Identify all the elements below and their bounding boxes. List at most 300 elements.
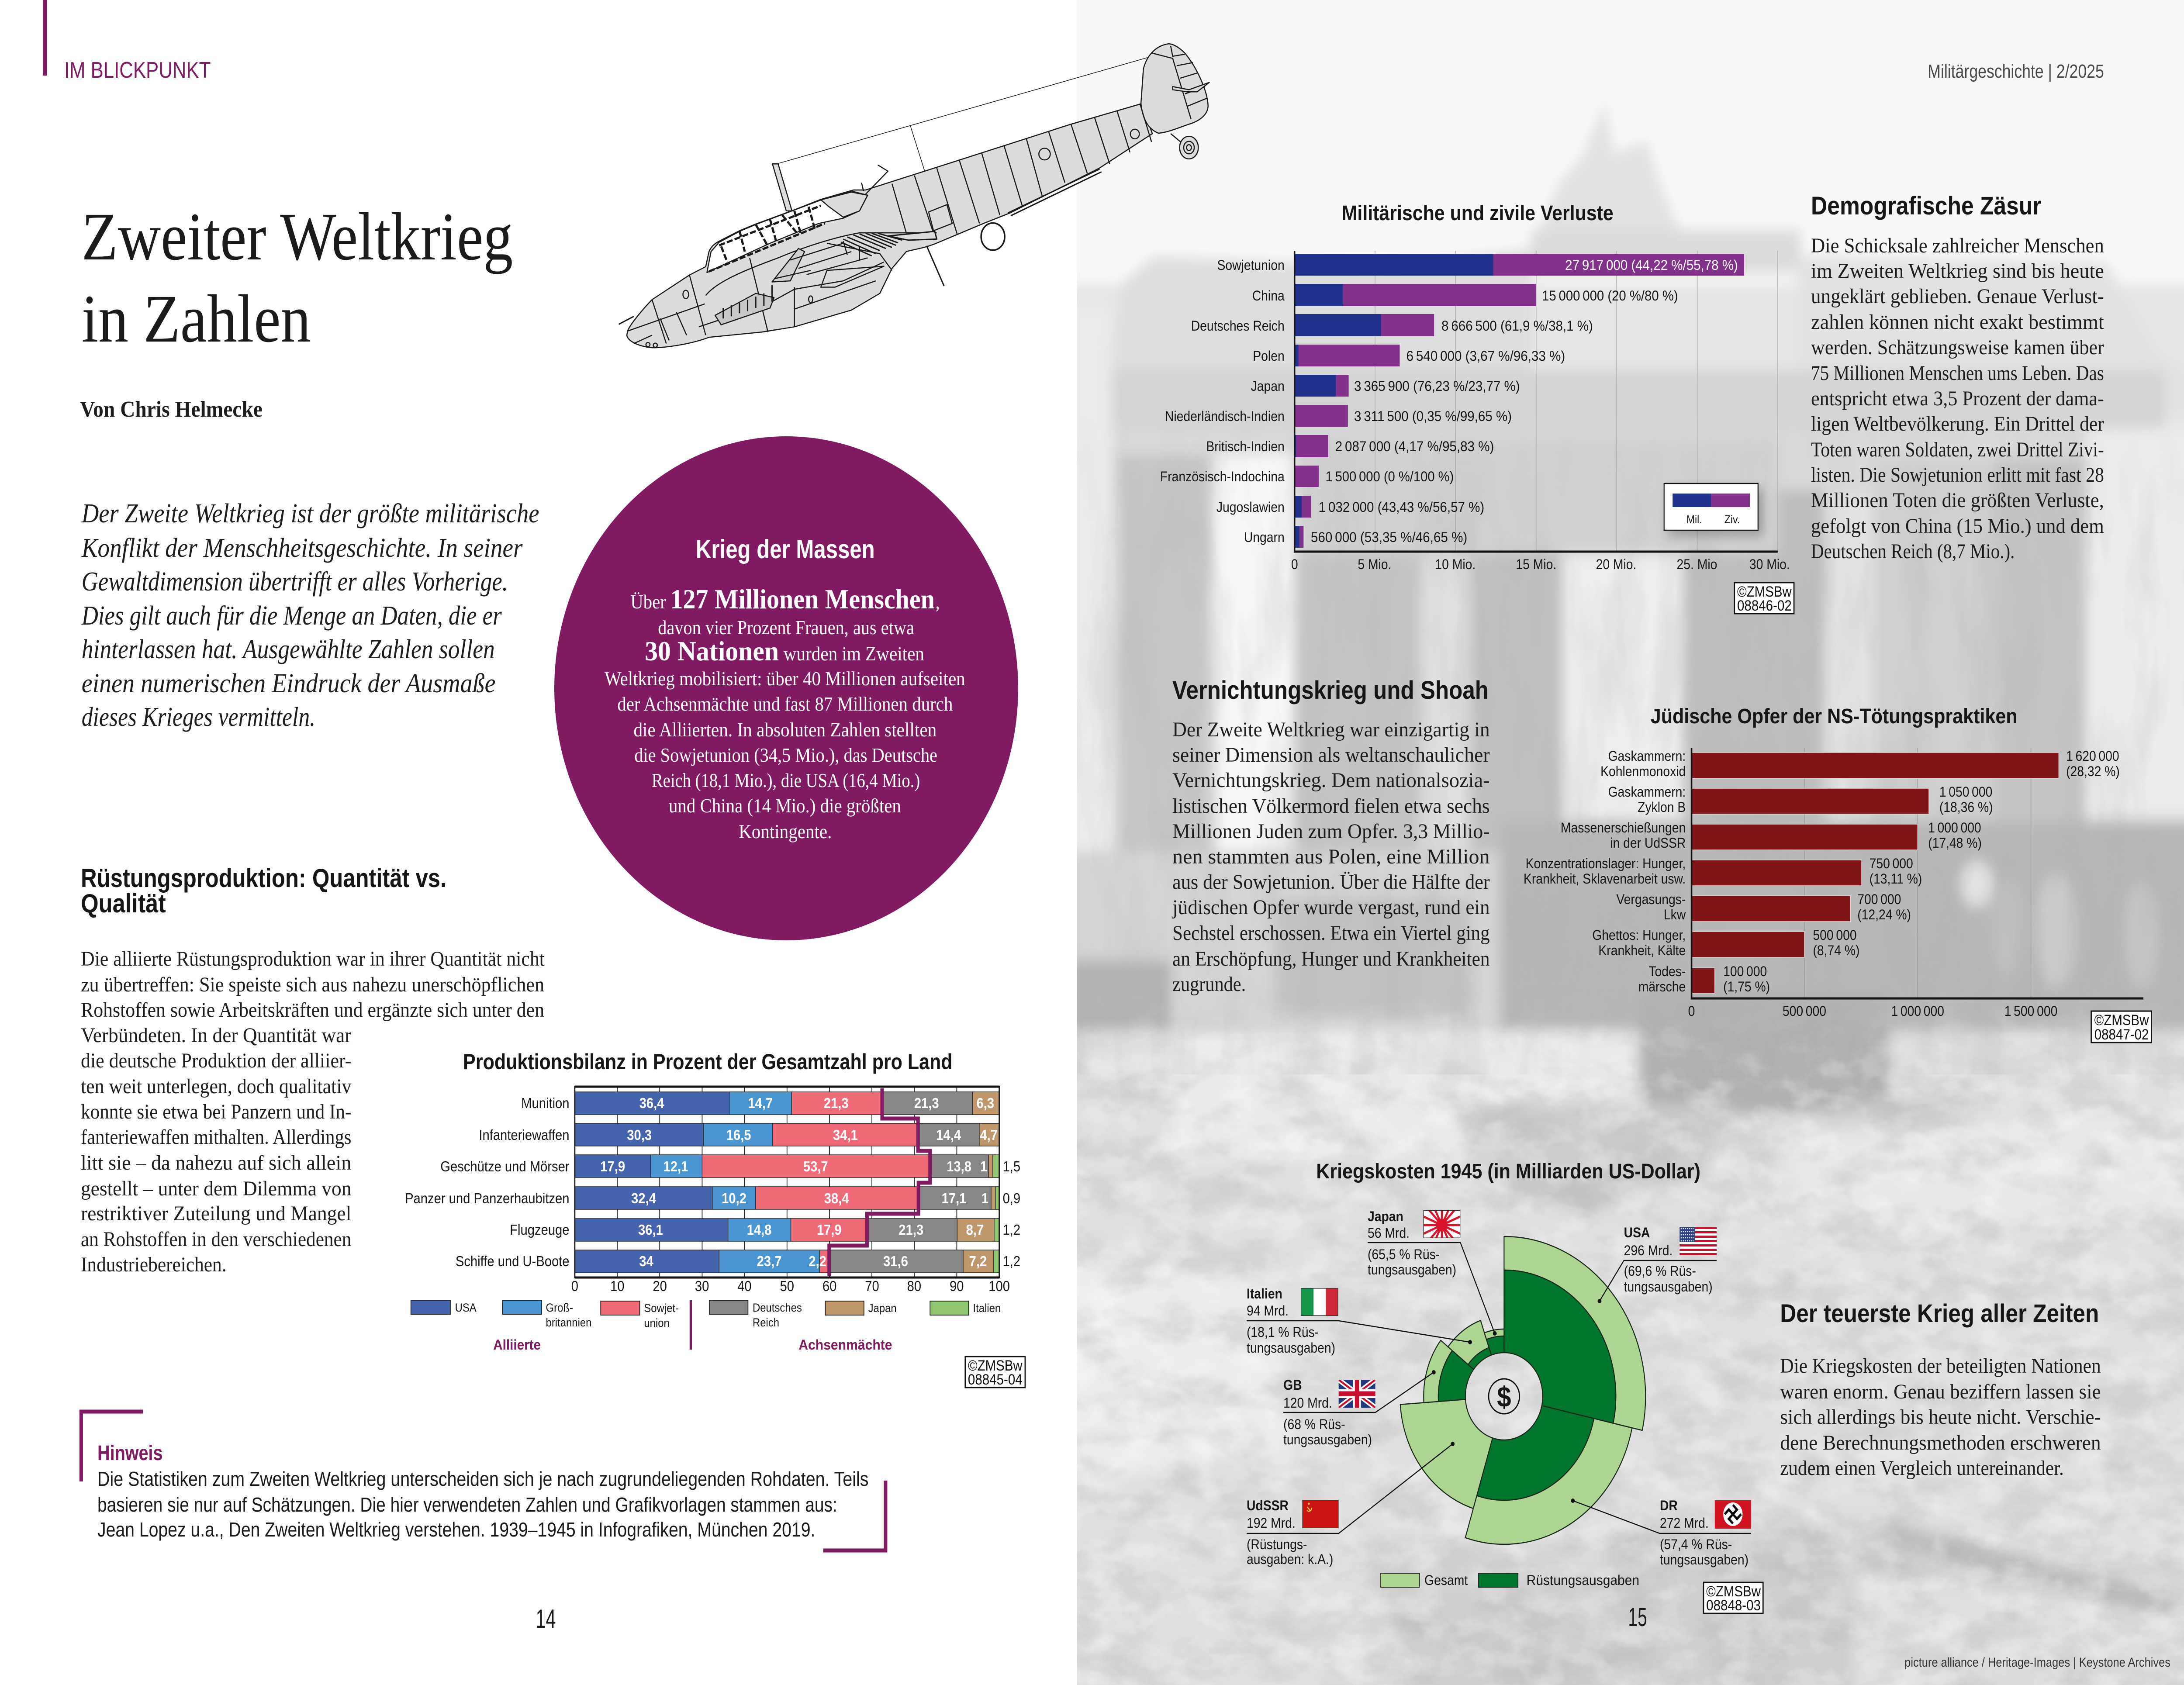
legend: Sowjet- — [644, 1302, 679, 1315]
bar values: 13,8 — [947, 1158, 971, 1174]
country labels: Jugoslawien — [1216, 500, 1285, 515]
text block: Demografische Zäsur: 75 Millionen Menschen ums Leben. Das — [1811, 362, 2104, 385]
x axis labels: 80 — [907, 1278, 921, 1294]
country labels: Polen — [1253, 349, 1285, 364]
heading: Rüstungsproduktion: Qualität — [81, 889, 166, 918]
circle text: Weltkrieg mobilisiert: über 40 Millionen aufseiten — [605, 668, 965, 690]
text block: Der teuerste Krieg: sich allerdings bis heute nicht. Verschie- — [1780, 1405, 2101, 1429]
label: UdSSR: (Rüstungs- — [1247, 1537, 1307, 1552]
credit box: ©ZMSBw — [968, 1357, 1023, 1374]
label: USA — [1598, 1225, 1717, 1303]
category labels: Konzentrationslager: Hunger, — [1526, 856, 1686, 871]
text block: Demografische Zäsur: gefolgt von China (15 Mio.) und dem — [1811, 514, 2104, 538]
legend box: Mil. — [1686, 514, 1702, 526]
chart: Jüdische Opfer — [1524, 704, 2152, 1043]
label: GB: 120 Mrd. — [1283, 1395, 1332, 1411]
value labels: 3 311 500 (0,35 %/99,65 %) — [1354, 409, 1512, 424]
bar values: 34,1 — [833, 1127, 858, 1143]
x axis labels: 30 Mio. — [1749, 557, 1790, 572]
legend box — [1664, 483, 1762, 535]
legend: Japan — [868, 1302, 897, 1315]
bar values: 14,7 — [748, 1095, 773, 1111]
value labels: 2 087 000 (4,17 %/95,83 %) — [1335, 439, 1494, 454]
label: Italien: tungsausgaben) — [1247, 1340, 1335, 1356]
country labels — [1160, 258, 1285, 545]
chart title: Jüdische Opfer der NS-Tötungspraktiken — [1651, 704, 2018, 728]
country labels: Niederländisch-Indien — [1165, 409, 1285, 424]
circle text: 30 Nationen — [645, 636, 779, 667]
country labels: Ungarn — [1244, 530, 1285, 545]
text block: Demografische Zäsur: zahlen können nicht exakt bestimmt — [1811, 311, 2104, 334]
text block: Demografische Zäsur — [1811, 234, 2104, 563]
bar values: 36,4 — [639, 1095, 664, 1111]
value labels: 560 000 (53,35 %/46,65 %) — [1311, 530, 1467, 545]
section label: IM BLICKPUNKT — [64, 58, 211, 83]
bar values: 6,3 — [976, 1095, 994, 1111]
value labels: 1 500 000 (0 %/100 %) — [1326, 469, 1454, 484]
bar values: 36,1 — [638, 1222, 663, 1238]
icon: dollar — [1489, 1379, 1520, 1414]
row labels: Schiffe und U-Boote — [456, 1253, 570, 1269]
category labels: Vergasungs- — [1616, 892, 1686, 907]
category labels — [1524, 749, 1686, 994]
photo credit: picture alliance / Heritage-Images | Keystone Archives — [1904, 1655, 2170, 1670]
text block: Rüstungsproduktion: Verbündeten. In der Quantität war — [81, 1024, 351, 1047]
circle text: , — [936, 591, 940, 613]
x axis labels — [571, 1278, 1010, 1294]
circle text: die Sowjetunion (34,5 Mio.), das Deutsche — [634, 745, 937, 767]
legend: Italien — [973, 1302, 1001, 1315]
label: DR: 272 Mrd. — [1660, 1516, 1709, 1531]
sector: Italien — [1448, 1320, 1491, 1369]
credit box: ©ZMSBw — [2094, 1012, 2149, 1028]
text block: Rüstungsproduktion: Rohstoffen sowie Arbeitskräften und ergänzte sich unter den — [81, 998, 544, 1022]
title: Zweiter Weltkrieg — [82, 199, 513, 274]
x axis labels: 20 — [653, 1278, 667, 1294]
chart title: Kriegskosten 1945 (in Milliarden US-Dollar) — [1316, 1160, 1700, 1183]
circle text: die Alliierten. In absoluten Zahlen stellten — [633, 719, 936, 741]
legend: Rüstungsausgaben — [1527, 1573, 1639, 1588]
text block: Vernichtungskrieg: an Erschöpfung, Hunger und Krankheiten — [1172, 947, 1490, 970]
label: UdSSR — [1247, 1442, 1455, 1567]
page number 15: 15 — [1628, 1603, 1647, 1632]
text block: Vernichtungskrieg: Vernichtungskrieg. Dem nationalsozia- — [1172, 769, 1490, 792]
value labels: 15 000 000 (20 %/80 %) — [1542, 288, 1678, 304]
x axis labels: 10 — [610, 1278, 625, 1294]
label: GB — [1283, 1370, 1436, 1447]
row labels: Panzer und Panzerhaubitzen — [405, 1190, 570, 1206]
flag: DR — [1715, 1500, 1751, 1529]
panel: Krieg der Massen circle — [554, 436, 1018, 940]
chart: Kriegskosten radial — [1247, 1160, 1763, 1613]
flag: GB — [1339, 1380, 1375, 1408]
label: USA: USA — [1624, 1225, 1650, 1240]
chart title: Militärische und zivile Verluste — [1342, 201, 1614, 225]
category labels: Massenerschießungen — [1561, 820, 1686, 836]
bar values: 53,7 — [803, 1158, 828, 1174]
x axis labels: 50 — [780, 1278, 794, 1294]
x axis labels: 25. Mio — [1677, 557, 1717, 572]
x axis labels: 15 Mio. — [1516, 557, 1556, 572]
value labels: (12,24 %) — [1857, 907, 1911, 922]
label: Alliierte: Alliierte — [493, 1337, 541, 1353]
bars — [1295, 254, 1744, 548]
heading: Der teuerste Krieg aller Zeiten: Der teuerste Krieg aller Zeiten — [1780, 1299, 2099, 1328]
text block: Rüstungsproduktion: gestellt – unter dem Dilemma von — [81, 1177, 351, 1200]
text block: Demografische Zäsur: Millionen Toten die größten Verluste, — [1811, 489, 2104, 512]
category labels: Todes- — [1648, 964, 1686, 979]
text block: Rüstungsproduktion: Industriebereichen. — [81, 1253, 227, 1276]
bar values: 17,1 — [942, 1190, 966, 1206]
label: Japan: (65,5 % Rüs- — [1368, 1247, 1440, 1262]
x axis labels: 1 000 000 — [1891, 1004, 1944, 1019]
row labels: Geschütze und Mörser — [440, 1158, 570, 1174]
text block: Demografische Zäsur: werden. Schätzungsweise kamen über — [1811, 336, 2104, 359]
sector: USA — [1504, 1236, 1645, 1430]
small segment values: 1,2 — [1003, 1253, 1020, 1269]
legend: britannien — [546, 1316, 591, 1329]
bar values: 10,2 — [722, 1190, 746, 1206]
Allies/Axis divider line — [829, 1088, 930, 1276]
small segment values: 0,9 — [1003, 1190, 1020, 1206]
category labels: Gaskammern: — [1608, 784, 1686, 800]
x axis labels: 100 — [988, 1278, 1010, 1294]
text block: Der teuerste Krieg: waren enorm. Genau beziffern lassen sie — [1780, 1380, 2101, 1403]
intro text: hinterlassen hat. Ausgewählte Zahlen sollen — [82, 634, 495, 664]
x axis labels: 1 500 000 — [2004, 1004, 2057, 1019]
bar values: 38,4 — [824, 1190, 849, 1206]
label: GB: GB — [1283, 1378, 1302, 1393]
label: USA: tungsausgaben) — [1624, 1279, 1713, 1295]
circle text — [605, 584, 965, 843]
text block: Demografische Zäsur: Toten waren Soldaten, zwei Drittel Zivi- — [1811, 438, 2104, 461]
label: USA: 296 Mrd. — [1624, 1243, 1673, 1258]
credit box: 08846-02 — [1737, 597, 1792, 614]
x axis labels: 0 — [571, 1278, 578, 1294]
bar values: 1 — [981, 1190, 988, 1206]
value labels: (1,75 %) — [1723, 979, 1770, 994]
category labels: Zyklon B — [1638, 800, 1686, 815]
small segment values: 1,5 — [1003, 1158, 1020, 1174]
bar values: 8,7 — [966, 1222, 984, 1238]
note box: Hinweis: Jean Lopez u.a., Den Zweiten Weltkrieg verstehen. 1939–1945 in Infografiken, München 2019. — [97, 1519, 815, 1541]
legend — [1381, 1573, 1639, 1588]
sector: DR — [1465, 1405, 1632, 1544]
text block: Demografische Zäsur: ligen Weltbevölkerung. Ein Drittel der — [1811, 412, 2104, 435]
label: UdSSR: ausgaben: k.A.) — [1247, 1552, 1333, 1567]
x axis labels — [1688, 1004, 2057, 1019]
intro text: Der Zweite Weltkrieg ist der größte militärische — [81, 498, 539, 528]
label: Italien: (18,1 % Rüs- — [1247, 1325, 1319, 1340]
x axis labels: 90 — [950, 1278, 964, 1294]
page marker bar — [43, 0, 47, 76]
title — [82, 199, 513, 356]
bar values: 17,9 — [817, 1222, 842, 1238]
text block: Der teuerste Krieg — [1780, 1354, 2101, 1480]
value labels: 1 032 000 (43,43 %/56,57 %) — [1319, 500, 1484, 515]
intro text: Gewaltdimension übertrifft er alles Vorherige. — [82, 566, 508, 597]
label: GB: (68 % Rüs- — [1283, 1417, 1345, 1432]
text block: Vernichtungskrieg: jüdischen Opfer wurde vergast, rund ein — [1171, 896, 1490, 919]
x axis labels: 10 Mio. — [1435, 557, 1476, 572]
credit box — [965, 1357, 1025, 1388]
value labels: 8 666 500 (61,9 %/38,1 %) — [1441, 318, 1593, 334]
country labels: Deutsches Reich — [1191, 318, 1285, 334]
text block: Rüstungsproduktion: Die alliierte Rüstungsproduktion war in ihrer Quantität nicht — [81, 947, 545, 970]
flag: Japan — [1420, 1206, 1464, 1245]
credit box: 08845-04 — [968, 1371, 1023, 1388]
text block: Der teuerste Krieg: Die Kriegskosten der beteiligten Nationen — [1780, 1354, 2101, 1378]
bar values: 34 — [639, 1253, 654, 1269]
label: USA: (69,6 % Rüs- — [1624, 1264, 1696, 1279]
heading: Demografische Zäsur: Demografische Zäsur — [1811, 191, 2041, 220]
icon: aircraft cutaway drawing — [619, 44, 1209, 348]
bar values: 12,1 — [663, 1158, 688, 1174]
value labels: 1 620 000 — [2066, 749, 2119, 764]
heading: Rüstungsproduktion: Rüstungsproduktion: Quantität vs. — [81, 864, 446, 893]
text block: Vernichtungskrieg: listischen Völkermord fielen etwa sechs — [1172, 794, 1490, 818]
value labels: (18,36 %) — [1939, 800, 1993, 815]
circle text: Kontingente. — [739, 821, 832, 843]
bar values: 14,4 — [936, 1127, 961, 1143]
text block: Vernichtungskrieg: zugrunde. — [1172, 973, 1246, 996]
credit box: 08848-03 — [1706, 1597, 1761, 1613]
legend: Deutsches — [753, 1302, 802, 1314]
bar values: 1 — [980, 1158, 987, 1174]
text block: Demografische Zäsur: Deutschen Reich (8,7 Mio.). — [1811, 540, 2015, 563]
circle text: der Achsenmächte und fast 87 Millionen durch — [617, 694, 953, 715]
page number 14: 14 — [536, 1605, 556, 1634]
x axis labels: 60 — [822, 1278, 836, 1294]
text block: Der teuerste Krieg: zudem einen Vergleich untereinander. — [1780, 1457, 2064, 1480]
value labels: 3 365 900 (76,23 %/23,77 %) — [1354, 379, 1520, 394]
country labels: Französisch-Indochina — [1160, 469, 1285, 484]
label: Achsenmächte: Achsenmächte — [798, 1337, 892, 1353]
row labels — [405, 1095, 570, 1269]
chart title: Produktionsbilanz in Prozent der Gesamtzahl pro Land — [463, 1050, 953, 1074]
label: Japan — [1368, 1206, 1497, 1336]
intro text: einen numerischen Eindruck der Ausmaße — [82, 668, 496, 698]
icon: dollar: $ — [1497, 1381, 1511, 1413]
credit box: ©ZMSBw — [1737, 583, 1792, 600]
text block: Vernichtungskrieg: Millionen Juden zum Opfer. 3,3 Millio- — [1172, 820, 1490, 843]
label: Japan: 56 Mrd. — [1368, 1226, 1410, 1241]
flag: USA — [1679, 1227, 1717, 1255]
label: Japan: Japan — [1368, 1209, 1403, 1224]
legend — [411, 1300, 1001, 1329]
sector: Japan — [1484, 1329, 1504, 1355]
credit box — [1735, 583, 1794, 614]
text block: Vernichtungskrieg: seiner Dimension als weltanschaulicher — [1172, 743, 1490, 767]
text block: Rüstungsproduktion: ten weit unterlegen, doch qualitativ — [81, 1075, 352, 1098]
legend: union — [644, 1317, 670, 1329]
bars — [1692, 753, 2059, 993]
category labels: Kohlenmonoxid — [1600, 764, 1686, 779]
stacked bars — [575, 1092, 999, 1273]
circle text: Über — [630, 591, 666, 613]
legend: Gesamt — [1424, 1573, 1468, 1588]
text block: Rüstungsproduktion: litt sie – da nahezu auf sich allein — [81, 1151, 351, 1174]
category labels: Ghettos: Hunger, — [1592, 928, 1686, 943]
heading: Vernichtungskrieg und Shoah: Vernichtungskrieg und Shoah — [1172, 676, 1489, 704]
bar values: 17,9 — [600, 1158, 625, 1174]
text block: Rüstungsproduktion: konnte sie etwa bei Panzern und In- — [81, 1100, 351, 1123]
legend: Reich — [753, 1316, 779, 1329]
value labels: 6 540 000 (3,67 %/96,33 %) — [1406, 349, 1565, 364]
category labels: Lkw — [1664, 907, 1686, 922]
bar values: 7,2 — [969, 1253, 987, 1269]
label: Japan: tungsausgaben) — [1368, 1262, 1456, 1278]
x axis labels: 70 — [865, 1278, 879, 1294]
bar values: 2,2 — [809, 1253, 826, 1269]
magazine label: Militärgeschichte | 2/2025 — [1928, 60, 2104, 82]
value labels: 27 917 000 (44,22 %/55,78 %) — [1565, 258, 1738, 273]
credit box — [1704, 1582, 1763, 1613]
text block: Vernichtungskrieg: Sechstel erschossen. Etwa ein Viertel ging — [1172, 922, 1490, 945]
label: Italien: 94 Mrd. — [1247, 1303, 1289, 1319]
bar values: 30,3 — [627, 1127, 652, 1143]
text block: Rüstungsproduktion: restriktiver Zuteilung und Mangel — [81, 1202, 351, 1225]
x axis labels: 500 000 — [1783, 1004, 1826, 1019]
value labels: 1 000 000 — [1928, 820, 1981, 836]
text block: Vernichtungskrieg: Der Zweite Weltkrieg war einzigartig in — [1172, 718, 1490, 741]
x axis labels: 5 Mio. — [1358, 557, 1391, 572]
x axis labels: 0 — [1291, 557, 1298, 572]
text block: Rüstungsproduktion — [81, 947, 545, 1276]
legend box: Ziv. — [1724, 514, 1740, 526]
flag: Italien — [1301, 1288, 1338, 1316]
value labels — [1723, 749, 2120, 994]
country labels: Sowjetunion — [1217, 258, 1285, 273]
legend: Groß- — [546, 1302, 573, 1314]
text block: Vernichtungskrieg — [1171, 718, 1490, 996]
credit box — [2091, 1011, 2152, 1043]
text block: Rüstungsproduktion: zu übertreffen: Sie speiste sich aus nahezu unerschöpflichen — [81, 973, 544, 996]
radial sectors — [1400, 1236, 1645, 1544]
circle text: Reich (18,1 Mio.), die USA (16,4 Mio.) — [652, 770, 920, 792]
bar values — [600, 1095, 998, 1269]
text block: Demografische Zäsur: ungeklärt geblieben. Genaue Verlust- — [1811, 285, 2104, 308]
sector: UdSSR — [1400, 1399, 1493, 1509]
right page background photo — [1044, 0, 2184, 1685]
x axis labels: 40 — [737, 1278, 752, 1294]
label: GB: tungsausgaben) — [1283, 1432, 1372, 1447]
label: DR: tungsausgaben) — [1660, 1552, 1749, 1568]
value labels: (13,11 %) — [1870, 871, 1922, 887]
bar values: 31,6 — [883, 1253, 908, 1269]
intro text: dieses Krieges vermitteln. — [82, 702, 315, 732]
circle text: 127 Millionen Menschen — [670, 584, 935, 615]
label: Italien: Italien — [1247, 1286, 1282, 1302]
bar values: 23,7 — [757, 1253, 781, 1269]
bar values: 4,7 — [980, 1127, 998, 1143]
small segment values: 1,2 — [1003, 1222, 1020, 1238]
text block: Rüstungsproduktion: die deutsche Produktion der alliier- — [81, 1049, 351, 1072]
intro text: Konflikt der Menschheitsgeschichte. In seiner — [81, 533, 523, 563]
intro text — [81, 498, 539, 732]
category labels: Gaskammern: — [1608, 749, 1686, 764]
text block: Demografische Zäsur: im Zweiten Weltkrieg sind bis heute — [1811, 259, 2104, 283]
chart: Produktionsbilanz — [405, 1050, 1025, 1388]
bar values: 32,4 — [631, 1190, 656, 1206]
circle text: wurden im Zweiten — [784, 643, 924, 665]
circle text: und China (14 Mio.) die größten — [669, 795, 901, 817]
x axis labels: 20 Mio. — [1596, 557, 1636, 572]
value labels: 500 000 — [1813, 928, 1857, 943]
label: DR — [1571, 1498, 1751, 1568]
value labels: (17,48 %) — [1928, 836, 1982, 851]
category labels: Krankheit, Kälte — [1598, 943, 1686, 958]
circle heading: Krieg der Massen — [696, 535, 875, 564]
note box: Hinweis: Hinweis — [97, 1441, 163, 1465]
value labels: 750 000 — [1870, 856, 1913, 871]
credit box: 08847-02 — [2094, 1026, 2149, 1043]
row labels: Infanteriewaffen — [479, 1127, 570, 1143]
row labels: Munition — [521, 1095, 570, 1111]
note box: Hinweis: Die Statistiken zum Zweiten Weltkrieg unterscheiden sich je nach zugrundeliegenden Rohdaten. Teils — [97, 1468, 868, 1491]
credit box: ©ZMSBw — [1706, 1583, 1761, 1599]
text block: Demografische Zäsur: entspricht etwa 3,5 Prozent der dama- — [1811, 387, 2104, 410]
note box: Hinweis: basieren sie nur auf Schätzungen. Die hier verwendeten Zahlen und Grafikvorlagen stammen aus: — [97, 1494, 837, 1516]
value labels: 1 050 000 — [1939, 784, 1992, 800]
x axis labels: 0 — [1688, 1004, 1695, 1019]
label: DR: DR — [1660, 1498, 1678, 1513]
category labels: in der UdSSR — [1610, 836, 1686, 851]
text block: Demografische Zäsur: Die Schicksale zahlreicher Menschen — [1811, 234, 2104, 257]
bar values: 21,3 — [914, 1095, 939, 1111]
flag: UdSSR — [1302, 1500, 1339, 1528]
label: UdSSR: UdSSR — [1247, 1498, 1289, 1513]
value labels: (8,74 %) — [1813, 943, 1859, 958]
small segment values — [1003, 1158, 1020, 1269]
value labels: 100 000 — [1723, 964, 1767, 979]
country labels: Britisch-Indien — [1206, 439, 1285, 454]
country labels: China — [1252, 288, 1285, 304]
author: Von Chris Helmecke — [80, 396, 263, 422]
text block: Vernichtungskrieg: nen stammten aus Polen, eine Million — [1172, 845, 1490, 868]
text block: Rüstungsproduktion: an Rohstoffen in den verschiedenen — [81, 1228, 351, 1251]
bar values: 21,3 — [898, 1222, 923, 1238]
text block: Vernichtungskrieg: aus der Sowjetunion. Über die Hälfte der — [1172, 870, 1490, 894]
label: Italien — [1247, 1286, 1472, 1356]
sector: GB — [1424, 1340, 1474, 1403]
circle text: davon vier Prozent Frauen, aus etwa — [658, 617, 914, 639]
note box: Hinweis — [81, 1412, 885, 1550]
bar values: 21,3 — [824, 1095, 849, 1111]
value labels: 700 000 — [1857, 892, 1901, 907]
text block: Rüstungsproduktion: fanteriewaffen mithalten. Allerdings — [81, 1126, 351, 1149]
bar values: 14,8 — [747, 1222, 771, 1238]
chart: Militärische und zivile Verluste — [1160, 201, 1794, 614]
x axis labels — [1291, 557, 1790, 572]
text block: Demografische Zäsur: listen. Die Sowjetunion erlitt mit fast 28 — [1811, 463, 2104, 487]
legend: USA — [455, 1302, 477, 1314]
intro text: Dies gilt auch für die Menge an Daten, die er — [81, 601, 502, 631]
label: UdSSR: 192 Mrd. — [1247, 1516, 1296, 1531]
value labels — [1311, 258, 1738, 545]
heading: Rüstungsproduktion — [81, 864, 446, 918]
category labels: märsche — [1638, 979, 1686, 994]
row labels: Flugzeuge — [510, 1222, 570, 1238]
bar values: 16,5 — [726, 1127, 751, 1143]
title: in Zahlen — [82, 281, 311, 356]
value labels: (28,32 %) — [2066, 764, 2120, 779]
country labels: Japan — [1251, 379, 1285, 394]
text block: Der teuerste Krieg: dene Berechnungsmethoden erschweren — [1780, 1431, 2101, 1454]
category labels: Krankheit, Sklavenarbeit usw. — [1524, 871, 1686, 887]
label: DR: (57,4 % Rüs- — [1660, 1537, 1732, 1552]
x axis labels: 30 — [695, 1278, 709, 1294]
